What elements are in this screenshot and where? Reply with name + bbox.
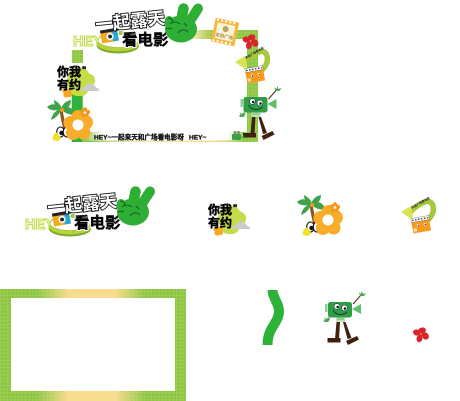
standalone title line one: 一起露天 (46, 191, 119, 218)
standalone camera mascot (323, 291, 366, 345)
title line one: 一起露天 (94, 8, 167, 35)
standalone grid frame (0, 289, 186, 401)
composite slogan: 你我 (57, 64, 81, 79)
standalone palm and flower (297, 195, 343, 236)
composite title group (73, 8, 198, 53)
composite camera mascot (238, 86, 282, 140)
standalone speech blob (208, 202, 250, 236)
composite bottom slogan: HEY~一起来天和广场看电影呀 HEY~ (94, 132, 207, 142)
composite palm and flower (47, 100, 93, 141)
standalone disc (49, 210, 91, 236)
composite promo ticket (211, 18, 239, 46)
standalone slogan: " (233, 203, 237, 213)
HEY outline text: HEY (73, 34, 103, 50)
composite arrow with clapper (235, 45, 267, 83)
composite small camera icon (232, 131, 244, 140)
standalone peace hand (116, 192, 150, 226)
composite slogan: " (82, 65, 86, 75)
composite arrow with clapper: 天和广场看电影 (244, 45, 265, 60)
composite promo ticket: 天和广场 (215, 31, 234, 42)
standalone arrow with clapper (401, 195, 433, 233)
grid border frame (72, 30, 258, 142)
standalone red flower (412, 327, 430, 343)
title line two: 看电影 (122, 31, 169, 49)
standalone HEY text: HEY (25, 217, 55, 233)
standalone title group (25, 191, 150, 236)
composite speech blob (57, 64, 99, 98)
composite red flower (242, 34, 260, 50)
standalone title line two: 看电影 (74, 214, 121, 232)
green wave on composite (72, 85, 82, 142)
composite slogan: 有约 (57, 77, 81, 92)
peace hand (164, 8, 198, 42)
film disc (97, 27, 139, 54)
standalone arrow with clapper: 天和广场看电影 (410, 195, 431, 210)
standalone slogan: 你我 (208, 202, 232, 217)
composite poster frame (70, 30, 258, 142)
standalone slogan: 有约 (208, 215, 232, 230)
standalone green wave (268, 290, 279, 345)
